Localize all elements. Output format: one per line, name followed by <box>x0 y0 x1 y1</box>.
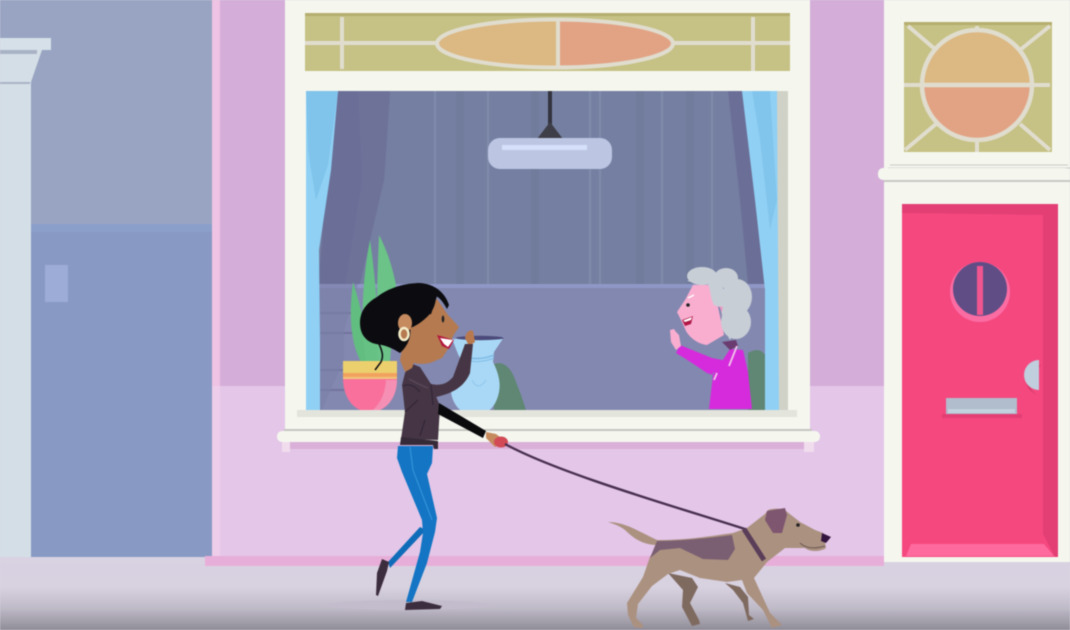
lowered arm <box>438 403 486 438</box>
earring <box>400 328 408 340</box>
ground shadow <box>326 600 490 610</box>
old lady face <box>677 285 724 345</box>
collar <box>744 529 764 560</box>
eye <box>442 316 444 322</box>
green chair right <box>748 350 765 410</box>
door cornice <box>878 165 1070 182</box>
door porthole <box>950 262 1010 322</box>
window frame <box>285 0 810 431</box>
ear <box>765 508 787 533</box>
hair <box>360 283 449 353</box>
jeans <box>397 446 437 602</box>
woman walking <box>360 283 508 610</box>
flower pot <box>343 361 397 412</box>
hand with leash handle <box>486 432 508 448</box>
dark curtains <box>318 91 765 410</box>
old lady hair <box>687 267 752 340</box>
mouth <box>800 543 825 548</box>
pavement <box>0 556 1070 630</box>
smile <box>437 335 454 349</box>
back leg <box>388 527 426 568</box>
door handle <box>1024 360 1041 395</box>
plant in pot <box>343 235 397 412</box>
ear <box>398 314 412 332</box>
pink house wall <box>205 0 884 566</box>
front door surround <box>878 0 1070 562</box>
old lady hand <box>670 329 681 350</box>
window <box>277 0 820 452</box>
body patch <box>650 535 735 560</box>
back shoe <box>376 559 389 596</box>
blue vase <box>451 336 504 412</box>
sun fan light <box>904 22 1052 152</box>
belt <box>400 437 438 449</box>
dog leash <box>505 444 748 530</box>
nose <box>821 533 831 543</box>
old lady body <box>677 347 752 409</box>
far legs <box>668 573 700 626</box>
interior wall <box>306 91 788 410</box>
white column <box>0 38 51 557</box>
body <box>608 509 826 628</box>
pink door <box>902 204 1058 557</box>
letter slot <box>942 398 1022 418</box>
front shoe <box>405 601 442 610</box>
elderly woman waving <box>670 267 765 410</box>
ceiling lamp <box>488 91 612 169</box>
window sill <box>277 429 820 452</box>
blue curtains <box>306 91 779 410</box>
window inner sill <box>297 410 797 417</box>
transom glass <box>305 13 790 71</box>
eye <box>796 523 800 527</box>
jacket <box>401 363 440 440</box>
dog <box>608 508 831 628</box>
neighbouring building <box>0 0 212 557</box>
green armchair <box>494 363 526 410</box>
raised arm <box>431 330 475 397</box>
head <box>360 283 459 372</box>
